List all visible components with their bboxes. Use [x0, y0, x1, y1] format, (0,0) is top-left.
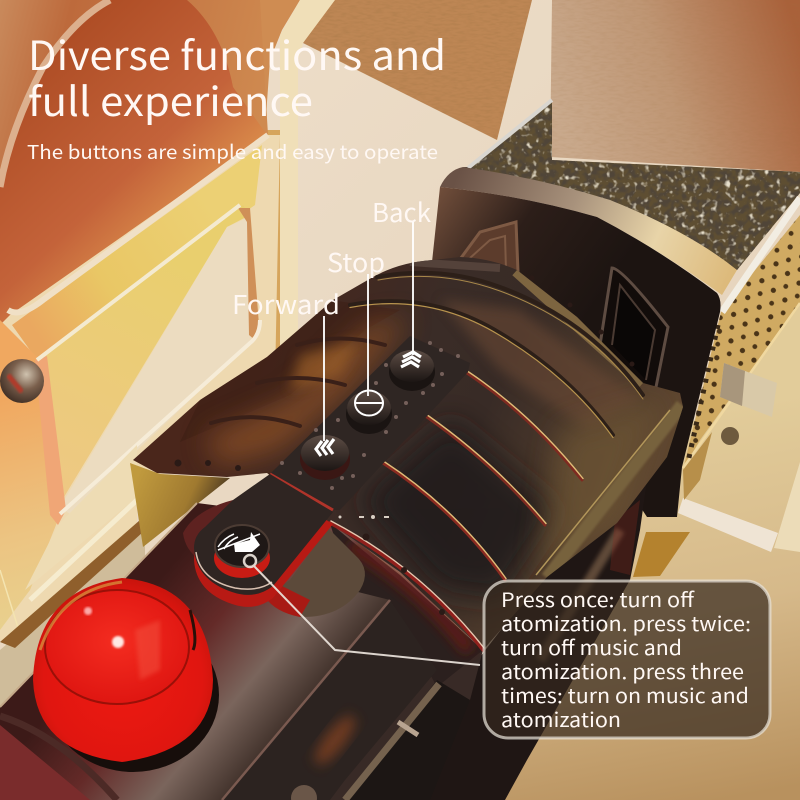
locomotive side below the cab [420, 480, 647, 800]
floor carpet patch [633, 532, 690, 577]
coal load in the tender [460, 100, 800, 275]
red glass dome [33, 578, 219, 772]
subtitle: The buttons are simple and easy to operate [27, 138, 438, 165]
label: stop: Stop [327, 243, 385, 280]
tender back wall [432, 187, 721, 517]
cab rivets [174, 276, 634, 615]
boiler hatch [291, 680, 470, 800]
door arch window [0, 0, 268, 325]
corner box [774, 462, 800, 552]
rubber tube [0, 716, 117, 800]
label: back: Back [372, 193, 432, 230]
floor on the right [480, 290, 800, 800]
callout box: Press once: turn off [501, 584, 695, 613]
door trim on the right [240, 0, 335, 390]
callout box: times: turn on music and [501, 680, 749, 709]
button pod [183, 474, 365, 617]
boiler dark panel [222, 600, 437, 800]
floor rail [678, 498, 778, 552]
label: forward: Forward [232, 285, 340, 322]
tender rim [440, 167, 737, 295]
title: full experience [28, 70, 313, 128]
tender coupling block [720, 363, 777, 445]
button: forward [300, 435, 350, 480]
fabric swatch top right [548, 0, 800, 175]
door knob [0, 359, 44, 403]
callout box: atomization. press twice: [501, 608, 751, 637]
leader lines [244, 222, 480, 665]
tender side with rivets [683, 198, 800, 500]
small panel markings [338, 515, 389, 519]
floor under the door [0, 520, 145, 707]
callout box: atomization. press three [501, 656, 744, 685]
button control strip [270, 336, 470, 510]
title [28, 24, 446, 128]
boiler surface [0, 503, 483, 800]
title: Diverse functions and [28, 24, 446, 82]
textured brown wall section [300, 0, 540, 145]
button: sound [214, 525, 270, 578]
callout box [484, 581, 770, 738]
cab roof [133, 257, 683, 650]
lower left reflection [0, 725, 90, 800]
door lower panels [0, 135, 280, 650]
callout box: atomization [501, 704, 621, 733]
callout box: turn off music and [501, 632, 682, 661]
cab roof ribs [211, 273, 643, 650]
cab side panel [130, 463, 230, 547]
button: back [389, 350, 435, 391]
button: stop [346, 390, 392, 434]
